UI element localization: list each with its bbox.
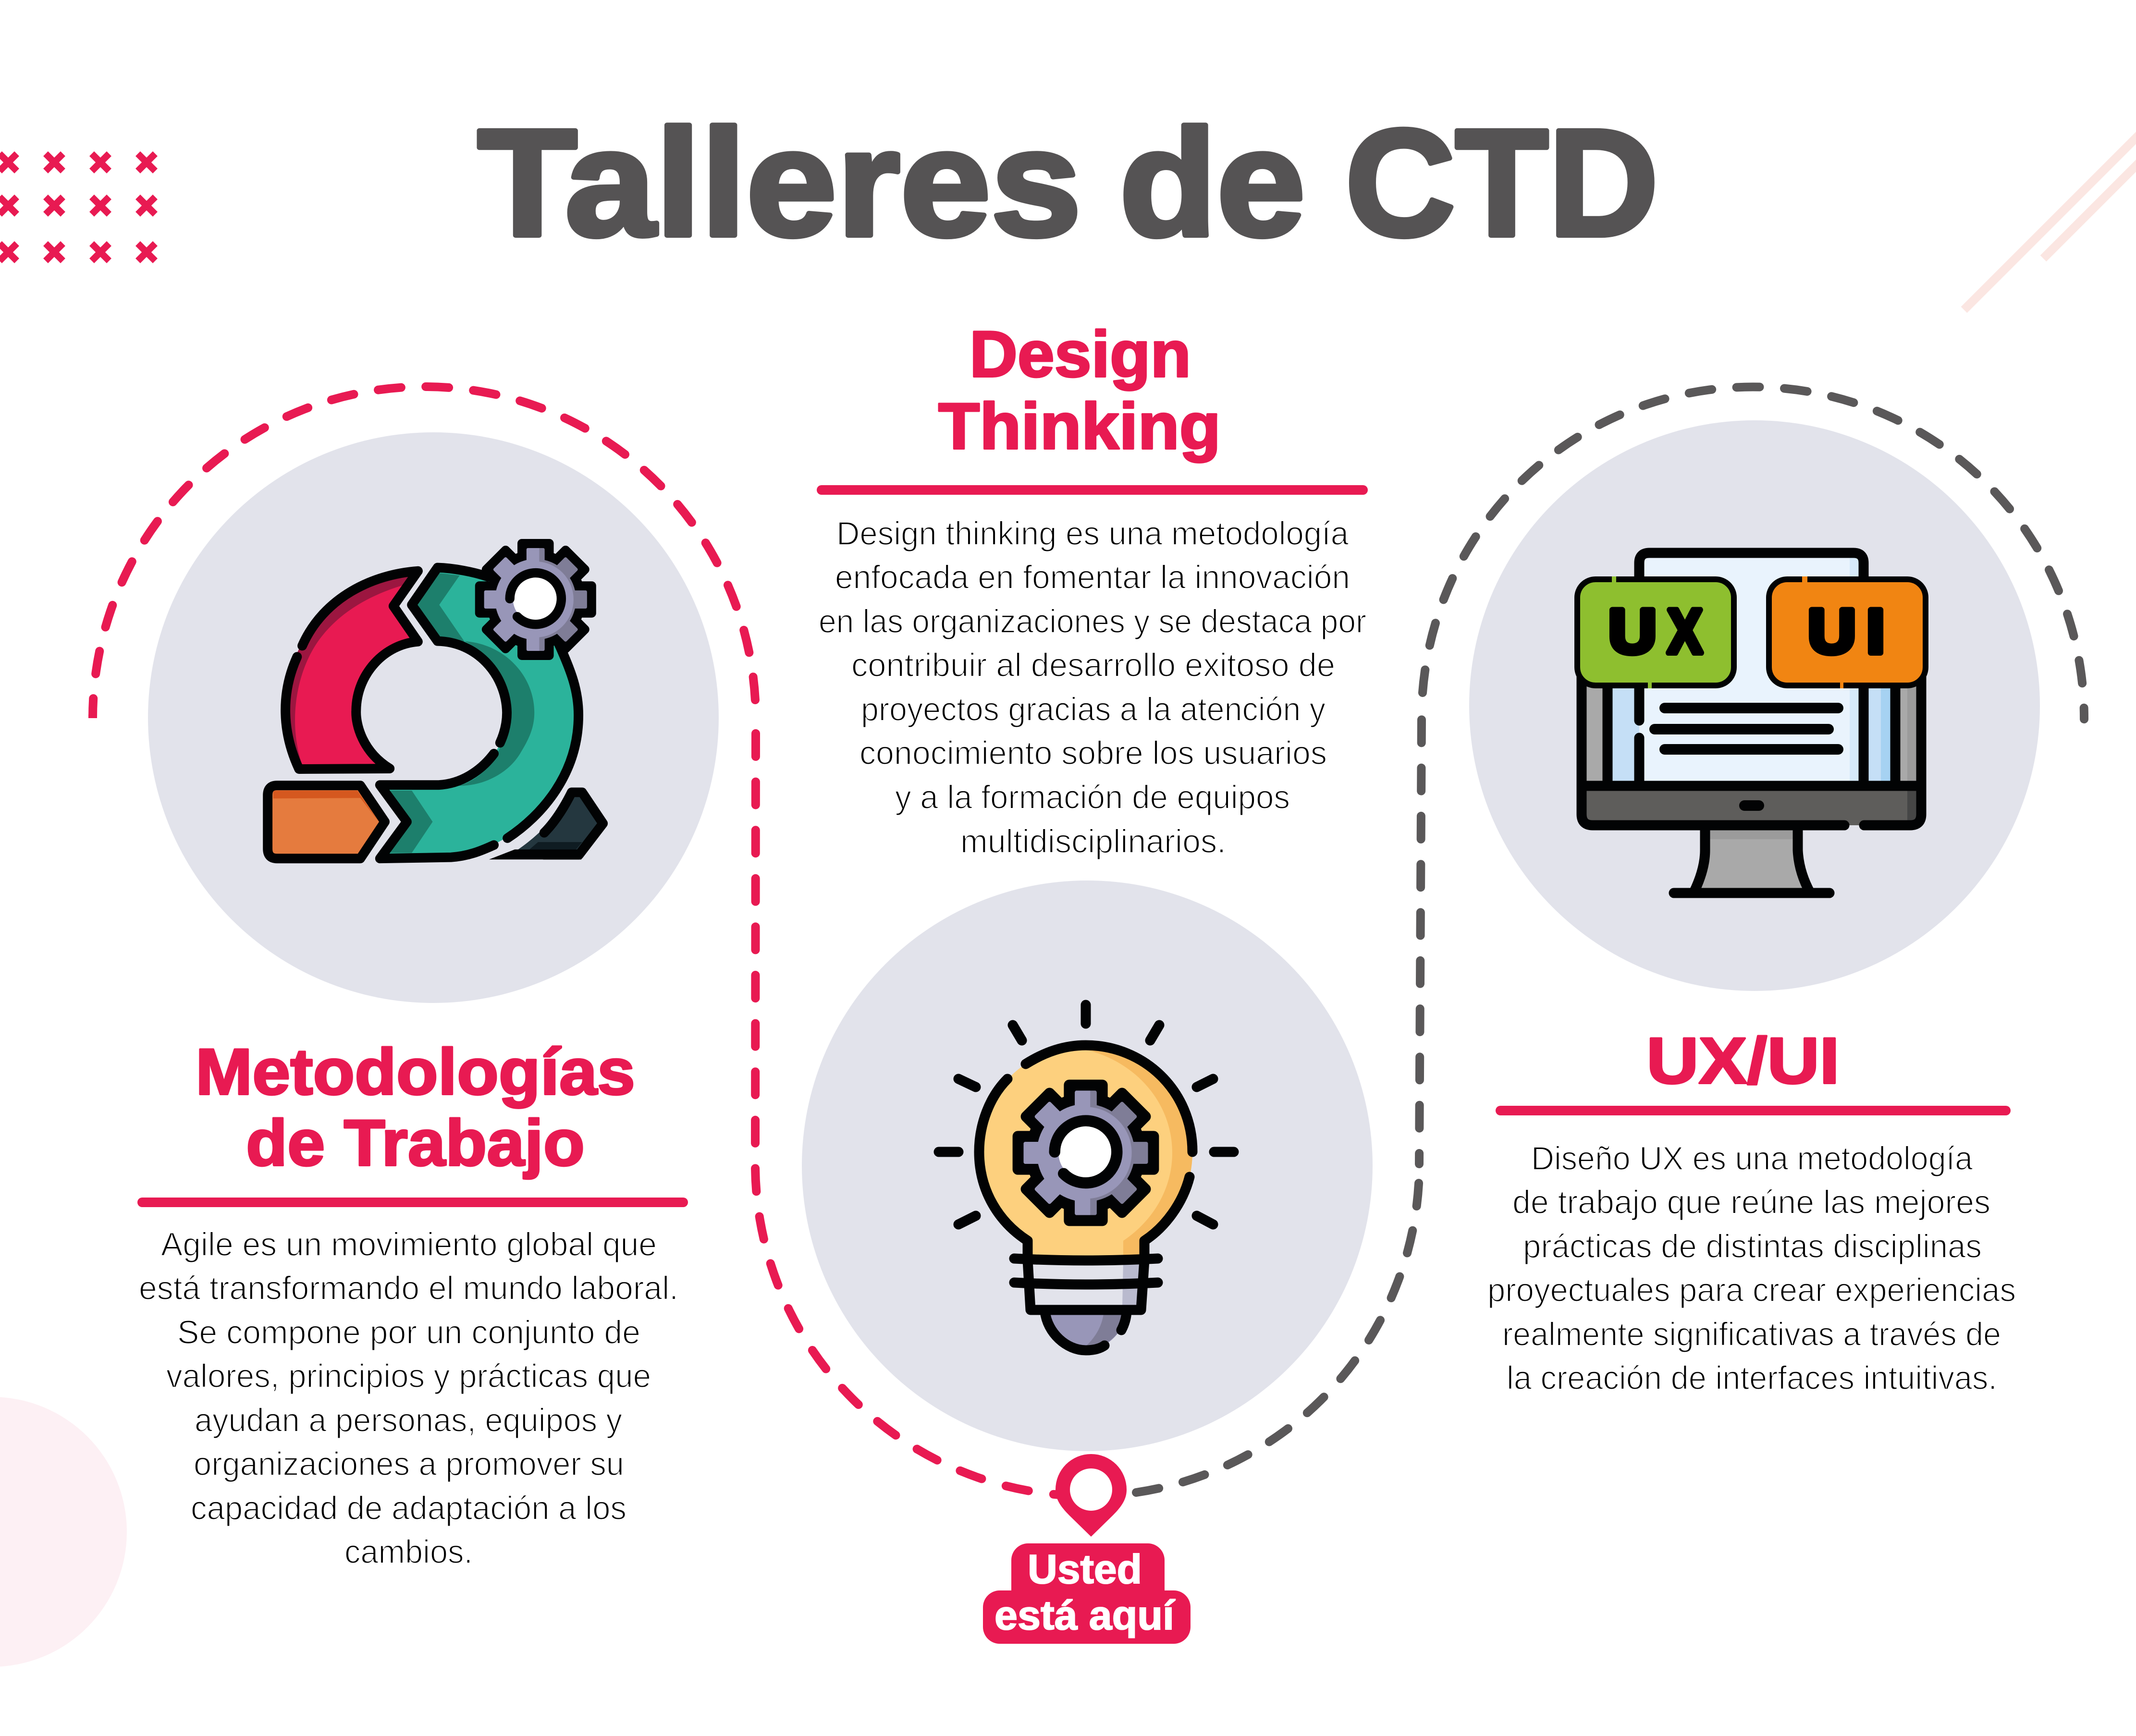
heading: Design Thinking: Design [970, 318, 1191, 391]
dashed route: grey segment [1136, 387, 2084, 1492]
body text: Design thinking [819, 515, 1366, 860]
body text: Agile: cambios. [344, 1533, 473, 1570]
label: Usted está aquí: Usted [1028, 1547, 1142, 1592]
body text: UX: prácticas de distintas disciplinas [1523, 1228, 1982, 1265]
body text: Agile: Se compone por un conjunto de [177, 1314, 640, 1351]
heading: Metodologías de Trabajo [196, 1035, 635, 1179]
panel circles background: left [148, 432, 719, 1003]
body text: Design thinking: proyectos gracias a la atención y [861, 691, 1326, 728]
label: UX: X [1668, 596, 1702, 666]
body text: Design thinking: y a la formación de equipos [895, 779, 1290, 816]
heading: Metodologías de Trabajo: Metodologías [196, 1035, 635, 1108]
panel: Metodologías de Trabajo [137, 536, 688, 1570]
title [478, 98, 1658, 268]
body text: Design thinking: enfocada en fomentar la innovación [835, 559, 1350, 596]
decoration: red x pattern [0, 154, 155, 261]
divider [817, 485, 1368, 495]
icon: agile cycle with gear [268, 536, 603, 859]
body text: Design thinking: contribuir al desarrollo exitoso de [851, 647, 1335, 684]
body text: UX: la creación de interfaces intuitivas. [1507, 1359, 1997, 1396]
body text: Design thinking: multidisciplinarios. [960, 823, 1226, 860]
icon: monitor with UX and UI labels [1577, 553, 1926, 893]
body text: Agile: valores, principios y prácticas que [166, 1357, 651, 1394]
panel circles background: middle [802, 880, 1373, 1451]
title: Talleres [478, 98, 1081, 268]
heading: Design Thinking: Thinking [938, 390, 1221, 463]
label: Usted está aquí: está aquí [994, 1593, 1175, 1638]
body text: Agile: capacidad de adaptación a los [191, 1490, 626, 1527]
body text: UX: realmente significativas a través de [1502, 1316, 2001, 1353]
panel: UX/UI [1487, 553, 2016, 1396]
title: de [1119, 98, 1305, 268]
label: UI: I [1866, 596, 1885, 666]
panel: Design Thinking [817, 318, 1368, 1350]
decoration: pink circle bottom left [0, 1397, 127, 1667]
label: UX [1577, 579, 1734, 685]
divider [137, 1198, 688, 1207]
location marker [983, 1454, 1191, 1644]
body text: UX [1487, 1140, 2016, 1396]
heading: UX/UI: UX/UI [1646, 1024, 1840, 1097]
body text: Agile [139, 1226, 678, 1570]
body text: Agile: organizaciones a promover su [194, 1445, 624, 1482]
divider [1496, 1106, 2011, 1115]
title: CTD [1345, 98, 1658, 268]
label: Usted está aquí [983, 1543, 1191, 1644]
body text: Agile: ayudan a personas, equipos y [195, 1402, 622, 1439]
label: UI [1769, 579, 1926, 685]
icon: map pin [1056, 1454, 1127, 1537]
dashed route: red segment [93, 387, 1076, 1496]
label: UX: U [1608, 596, 1657, 666]
icon: light bulb with gear [939, 1005, 1234, 1350]
body text: UX: de trabajo que reúne las mejores [1512, 1184, 1990, 1221]
body text: Agile: Agile es un movimiento global que [161, 1226, 657, 1263]
decoration: pink diagonal lines top right [1964, 131, 2136, 310]
body text: Design thinking: Design thinking es una metodología [836, 515, 1349, 552]
body text: UX: Diseño UX es una metodología [1531, 1140, 1973, 1177]
body text: Design thinking: conocimiento sobre los usuarios [859, 734, 1327, 771]
panel circles background: right [1469, 420, 2040, 991]
label: UI: U [1808, 596, 1856, 666]
body text: Design thinking: en las organizaciones y se destaca por [819, 603, 1366, 640]
heading: Metodologías de Trabajo: de Trabajo [246, 1106, 585, 1179]
heading: Design Thinking [938, 318, 1221, 463]
body text: Agile: está transformando el mundo laboral. [139, 1270, 678, 1307]
body text: UX: proyectuales para crear experiencias [1487, 1271, 2016, 1308]
